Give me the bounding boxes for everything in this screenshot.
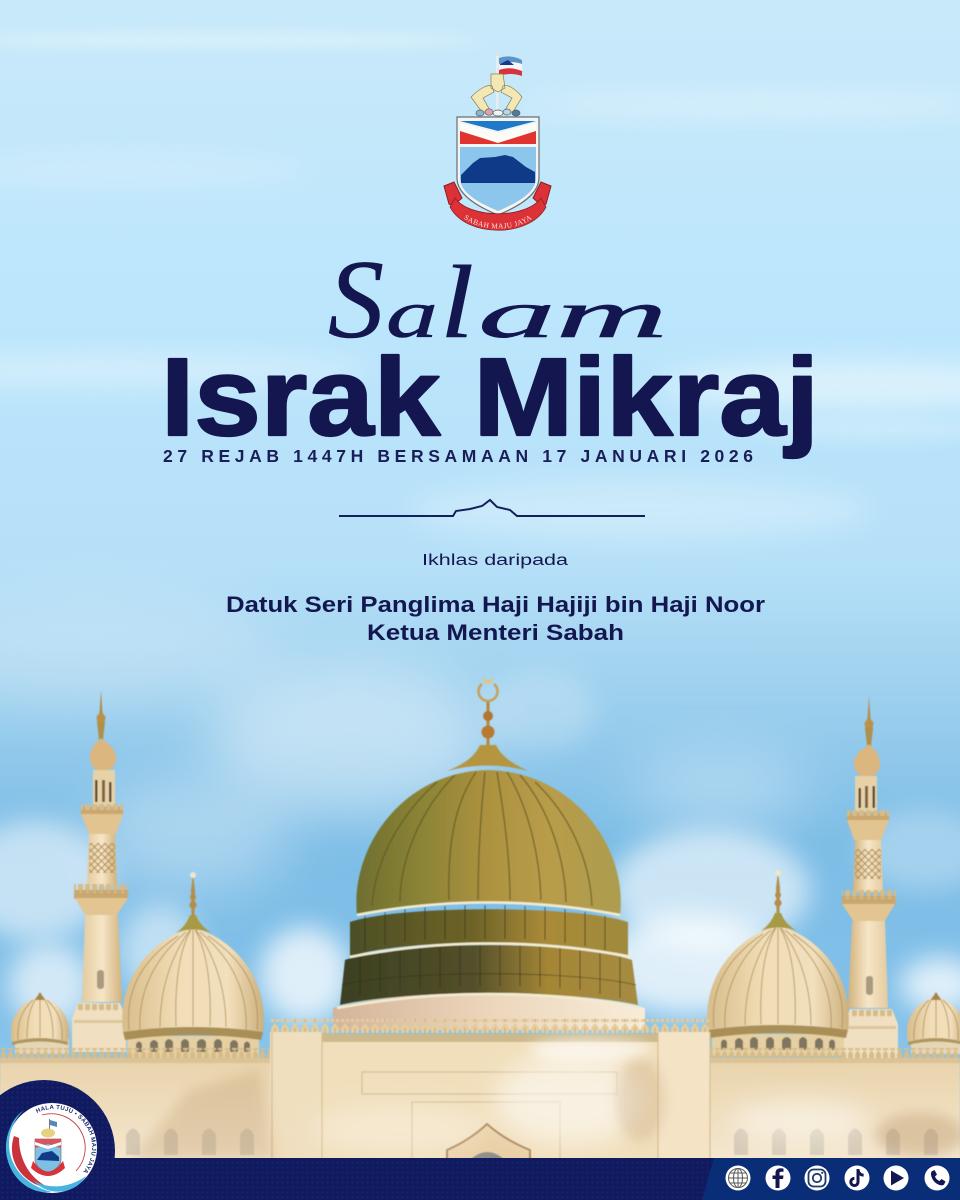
lower sky clouds (0, 595, 960, 1027)
badge swoosh accent (6, 1110, 52, 1192)
right side dome (707, 870, 849, 1056)
mosque illustration (0, 677, 960, 1160)
title: Israk Mikraj: Israk Mikraj (161, 336, 819, 459)
central golden dome (333, 770, 645, 1030)
hala tuju badge (0, 1080, 115, 1193)
icon: youtube play (884, 1166, 908, 1190)
title script: Salam: S (328, 238, 384, 362)
motto ribbon (443, 181, 552, 231)
flag on pole (495, 52, 522, 113)
icon: telephone (924, 1166, 950, 1190)
title script: Salam: a (386, 276, 438, 352)
icon: facebook (766, 1166, 790, 1190)
icon: instagram (804, 1166, 830, 1190)
title script: Salam: l (440, 245, 474, 360)
badge ring text: HALA TUJU • SABAH MAJU JAYA (36, 1104, 96, 1173)
divider with mountain silhouette (339, 500, 645, 516)
badge crest (31, 1119, 65, 1176)
central dome finial (447, 677, 528, 771)
helmet wreath (476, 109, 520, 116)
motto ribbon: SABAH MAJU JAYA (464, 215, 532, 228)
date line: 27 REJAB 1447H BERSAMAAN 17 JANUARI 2026 (163, 446, 753, 466)
social icons row (726, 1166, 950, 1190)
left minaret (72, 690, 128, 1052)
icon: tiktok (844, 1166, 870, 1190)
far right small dome (907, 992, 960, 1054)
icon: website globe (726, 1166, 750, 1190)
left side dome (122, 872, 264, 1058)
footer bar (0, 1158, 960, 1200)
sender label: Ikhlas daripada (422, 552, 569, 569)
upper sky cloud streaks (0, 33, 960, 540)
right minaret (842, 696, 898, 1058)
side wings of mosque wall (0, 1048, 960, 1160)
state crest (443, 52, 552, 231)
shield (457, 117, 539, 215)
sender name and title (226, 592, 766, 645)
title script: Salam: am (478, 276, 668, 352)
far left small dome (11, 992, 69, 1054)
central mosque facade (270, 1019, 710, 1160)
sender name and title: Ketua Menteri Sabah (367, 620, 624, 645)
arms holding pole (471, 74, 522, 112)
right social strip (702, 1158, 960, 1200)
sender name and title: Datuk Seri Panglima Haji Hajiji bin Haji Noor (226, 592, 766, 617)
haze and stains over wall (130, 1038, 960, 1160)
